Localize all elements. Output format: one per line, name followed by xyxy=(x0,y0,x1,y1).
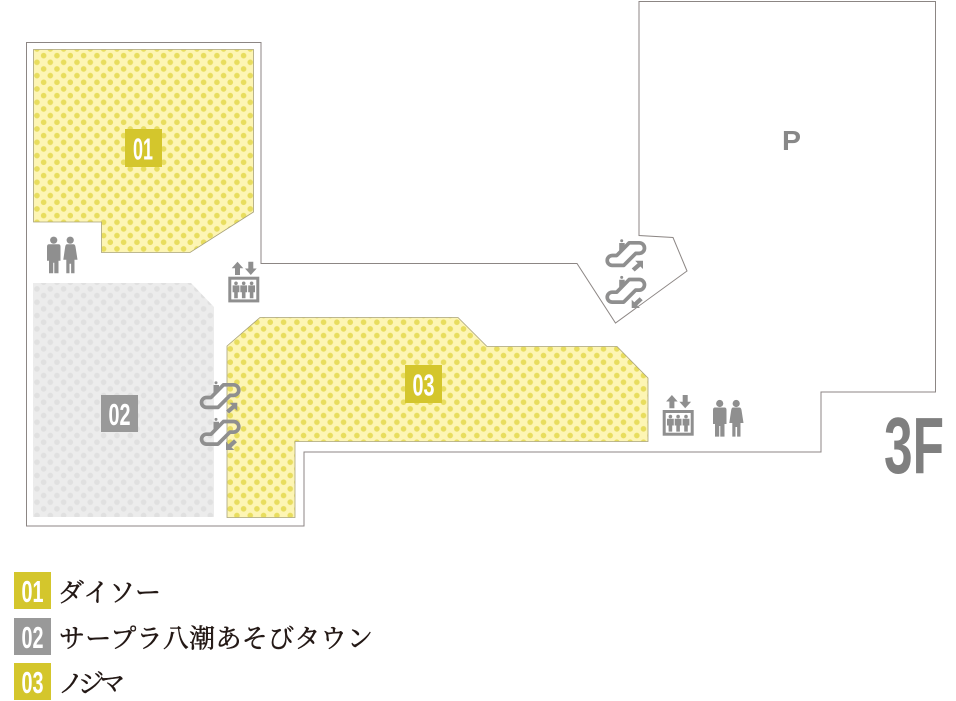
label 03 xyxy=(405,365,442,403)
legend 01: 01 xyxy=(22,574,44,609)
icon: escalator up right xyxy=(607,239,644,272)
legend 02: 02 xyxy=(22,620,44,655)
icon: restroom left xyxy=(47,237,78,273)
legend 01: ダイソー xyxy=(58,578,161,608)
legend 03: 03 xyxy=(22,665,44,700)
parking label: P xyxy=(782,125,801,156)
label 02: 02 xyxy=(108,397,130,432)
area 03 xyxy=(227,318,648,518)
area 01 xyxy=(34,50,254,252)
legend 02: サープラ八潮あそびタウン xyxy=(59,624,373,654)
icon: elevator right xyxy=(664,395,692,434)
icon: escalator down left xyxy=(202,418,239,450)
building outline xyxy=(26,2,936,526)
label 03: 03 xyxy=(412,368,434,402)
icon: restroom right xyxy=(713,400,744,437)
label 02 xyxy=(101,395,138,432)
icon: elevator left xyxy=(230,262,258,301)
label 01: 01 xyxy=(133,132,153,166)
legend 03: ノジマ xyxy=(58,670,125,698)
icon: escalator up left xyxy=(202,381,239,414)
legend 01 xyxy=(14,572,161,609)
area 02 xyxy=(33,283,214,517)
icon: escalator down right xyxy=(607,276,644,308)
label 01 xyxy=(125,129,162,167)
legend 02 xyxy=(14,618,373,655)
legend 03 xyxy=(14,663,125,700)
